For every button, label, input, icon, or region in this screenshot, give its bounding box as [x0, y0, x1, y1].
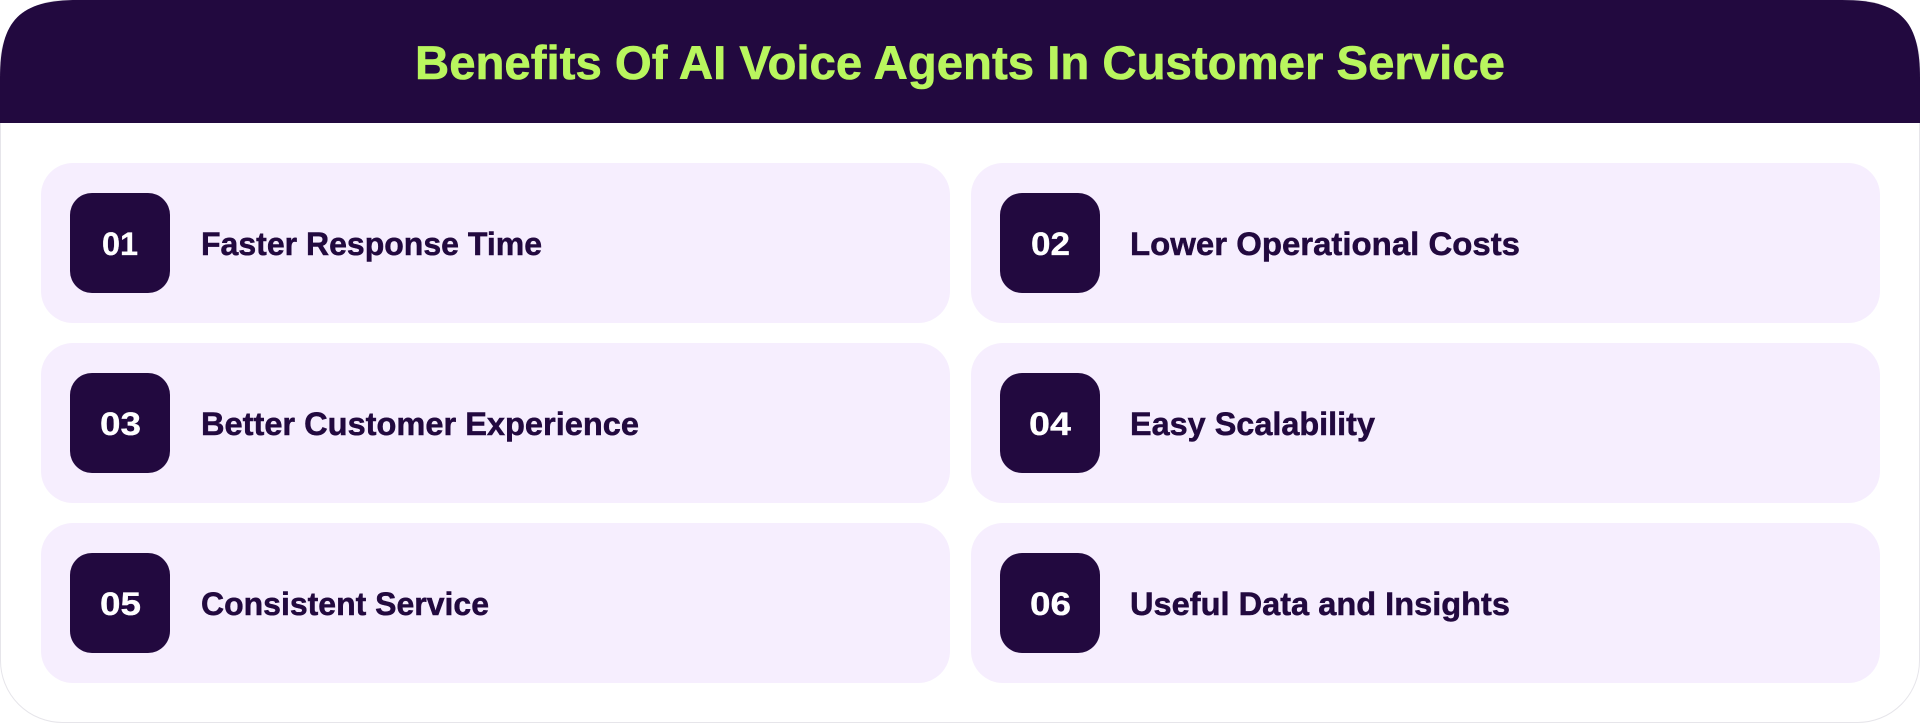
badge 03: 03 — [100, 406, 141, 442]
badge 05: 05 — [100, 586, 141, 622]
card 03 — [41, 343, 950, 503]
badge 01 — [70, 193, 170, 293]
badge 04: 04 — [1029, 406, 1071, 442]
title: Benefits Of AI Voice Agents In Customer Service — [415, 36, 1505, 89]
label: faster response time: Faster Response Time — [201, 226, 542, 262]
badge 05 — [70, 553, 170, 653]
card 04 — [971, 343, 1880, 503]
badge 02 — [1000, 193, 1100, 293]
card 05 — [41, 523, 950, 683]
label: useful data and insights: Useful Data and Insights — [1130, 586, 1510, 622]
badge 06: 06 — [1030, 586, 1071, 622]
card 06 — [971, 523, 1880, 683]
label: lower operational costs: Lower Operational Costs — [1130, 226, 1520, 262]
label: consistent service: Consistent Service — [201, 586, 489, 622]
badge 02: 02 — [1031, 226, 1070, 262]
card 01 — [41, 163, 950, 323]
badge 04 — [1000, 373, 1100, 473]
badge 03 — [70, 373, 170, 473]
card 02 — [971, 163, 1880, 323]
label: easy scalability: Easy Scalability — [1130, 406, 1375, 442]
badge 01: 01 — [102, 226, 138, 262]
badge 06 — [1000, 553, 1100, 653]
header band — [0, 0, 1920, 123]
label: better customer experience: Better Customer Experience — [201, 406, 639, 442]
